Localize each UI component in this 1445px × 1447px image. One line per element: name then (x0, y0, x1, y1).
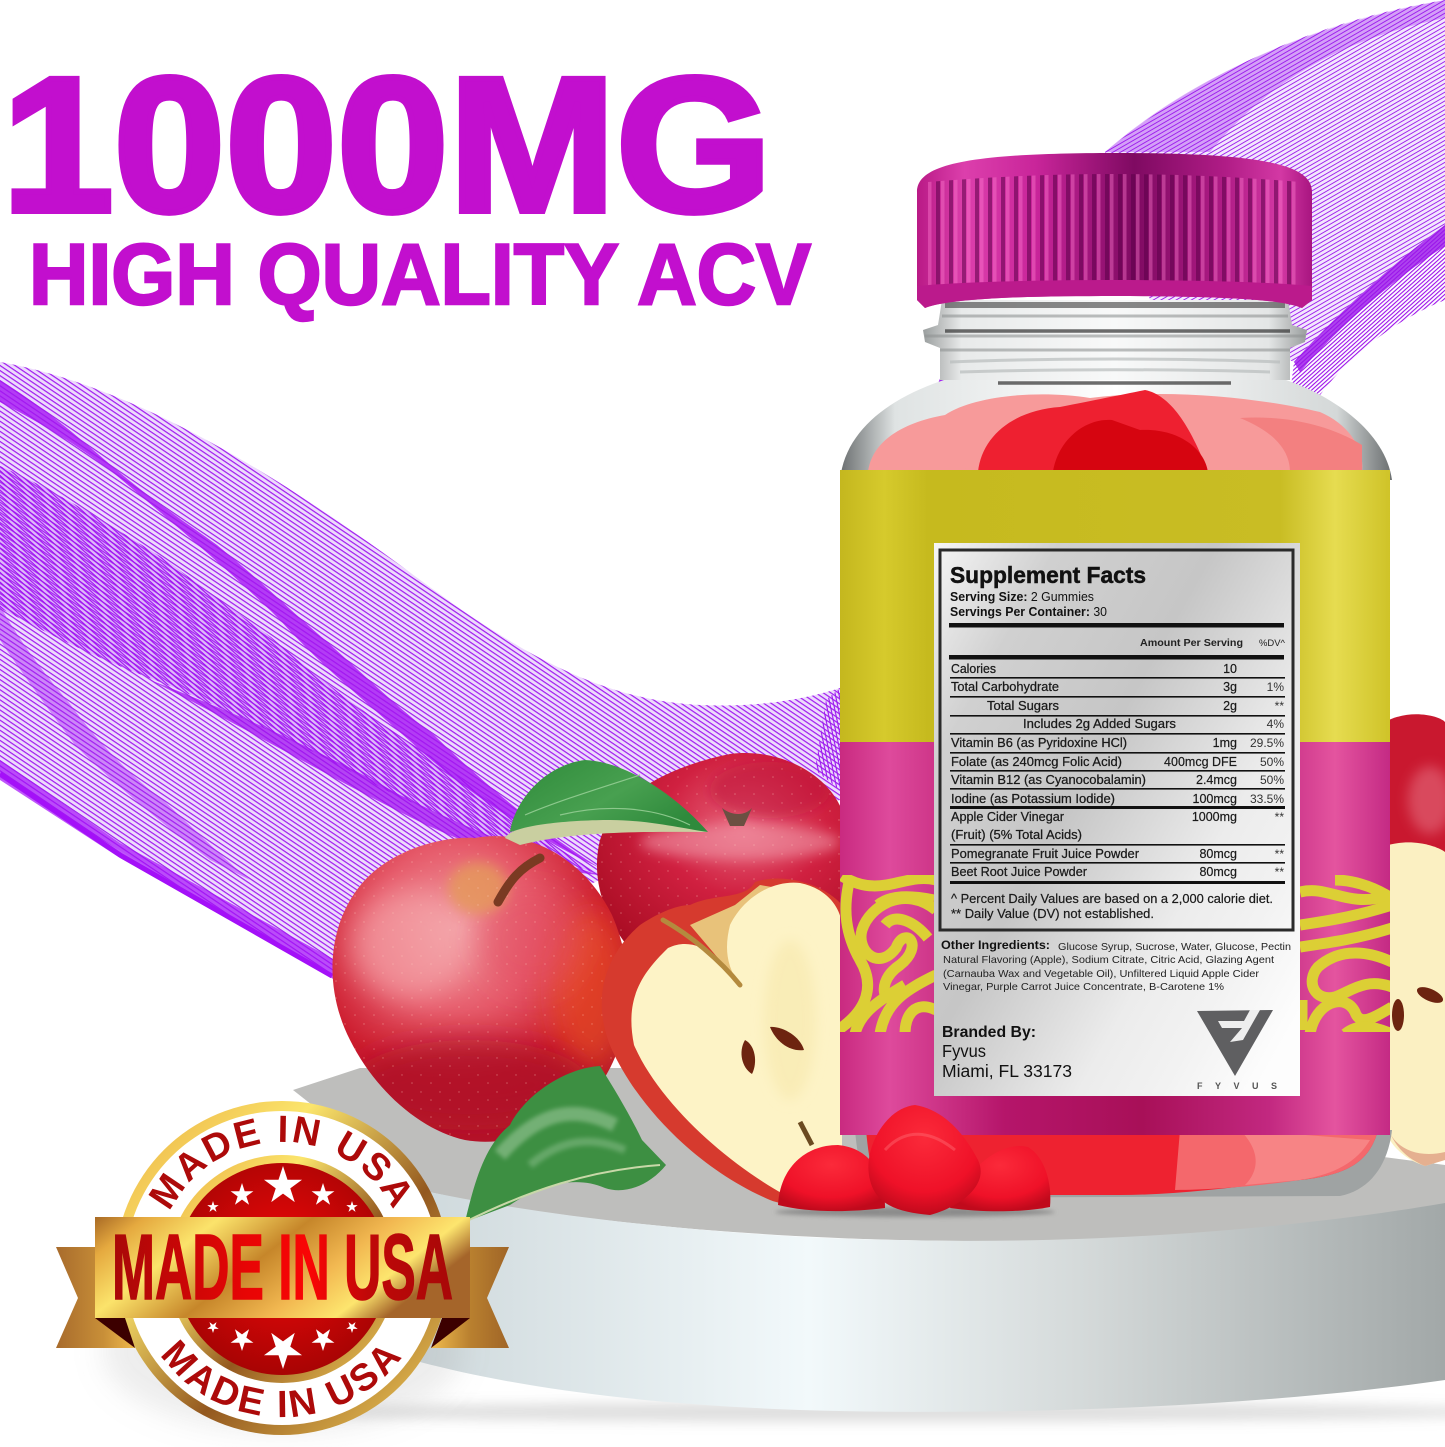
other ingredients: Other Ingredients: (941, 938, 1050, 952)
table daily values: ** (1275, 810, 1284, 824)
ribbon front (95, 1217, 470, 1318)
cut apple stem (663, 920, 740, 985)
bottle label (838, 470, 1392, 1135)
table row labels (951, 662, 1176, 879)
other ingredients: Glucose Syrup, Sucrose, Water, Glucose, Pectin (1058, 941, 1291, 953)
cut apple inner skin (690, 885, 790, 990)
table daily values: 4% (1267, 717, 1284, 731)
table amounts: 10 (1223, 662, 1237, 676)
ribbon tail right (431, 1247, 509, 1348)
badge arc text top: MADE IN USA (148, 1116, 410, 1210)
badge stars (207, 1166, 358, 1369)
table amounts: 2g (1223, 699, 1237, 713)
icon: fyvus logo (1197, 1010, 1277, 1091)
branded by: Miami, FL 33173 (942, 1061, 1072, 1081)
cut apple flesh (631, 883, 842, 1196)
apple: front left (332, 836, 622, 1142)
table row labels: Pomegranate Fruit Juice Powder (951, 847, 1139, 861)
serving info: Serving Size: 2 Gummies (950, 590, 1094, 604)
ribbon dark folds (95, 1318, 470, 1348)
gummies on platform (775, 1105, 1055, 1217)
wave lens: dense middle (0, 466, 600, 875)
badge white field (125, 1111, 439, 1425)
wave base: whole ribbon (0, 362, 840, 985)
platform shadow (280, 1402, 1445, 1422)
bottle neck glass (923, 300, 1307, 380)
apple behind bottle, right (1385, 714, 1445, 1166)
wave crease: upper dark fold (0, 380, 600, 868)
platform top surface (293, 1068, 1445, 1241)
table row labels: Apple Cider Vinegar (951, 810, 1064, 824)
apple: back (596, 753, 840, 942)
bottle cap (917, 153, 1312, 308)
badge arc text bottom: MADE IN USA (161, 1339, 402, 1418)
facts heading: Supplement Facts (950, 562, 1146, 588)
other ingredients: Vinegar, Purple Carrot Juice Concentrate, B-Carotene 1% (943, 981, 1224, 993)
title: 1000MG: 1000MG (2, 37, 772, 252)
table amounts (1164, 662, 1237, 879)
table amounts: 100mcg (1193, 792, 1237, 806)
apple: cut half (602, 879, 842, 1205)
bottle (838, 153, 1392, 1198)
supplement facts panel (934, 543, 1300, 1096)
table row labels: Vitamin B12 (as Cyanocobalamin) (951, 773, 1146, 787)
table daily values: 29.5% (1250, 736, 1284, 750)
ribbon headline: MADE IN USA (112, 1215, 453, 1319)
table daily values (1250, 680, 1284, 879)
footnotes: ^ Percent Daily Values are based on a 2,000 calorie diet. (951, 892, 1273, 906)
branded by: Fyvus (942, 1041, 986, 1061)
table row labels: (Fruit) (5% Total Acids) (951, 828, 1082, 842)
other ingredients (941, 938, 1291, 993)
wave: crosshatch near bottle (815, 688, 840, 790)
purple wave: top right (936, 0, 1445, 395)
leaf: bottom (465, 1066, 666, 1222)
table row labels: Folate (as 240mcg Folic Acid) (951, 755, 1122, 769)
table daily values: 50% (1260, 773, 1284, 787)
table row labels: Includes 2g Added Sugars (1023, 717, 1176, 731)
table amounts: 3g (1223, 680, 1237, 694)
apple stem (498, 858, 540, 902)
table header: Amount Per Serving (1140, 637, 1243, 649)
table header (1140, 637, 1286, 649)
badge soft shadow (102, 1272, 462, 1432)
label swirl right (1300, 880, 1392, 1034)
apple seeds (741, 1040, 755, 1074)
table row labels: Total Sugars (987, 699, 1059, 713)
facts box border (940, 550, 1293, 930)
table amounts: 400mcg DFE (1164, 755, 1237, 769)
table daily values: 50% (1260, 755, 1284, 769)
table header: %DV^ (1259, 638, 1286, 649)
bottle shoulder glass (840, 380, 1392, 480)
table daily values: ** (1275, 699, 1284, 713)
other ingredients: (Carnauba Wax and Vegetable Oil), Unfiltered Liquid Apple Cider (943, 968, 1260, 980)
table amounts: 2.4mcg (1196, 773, 1237, 787)
gummies inside top of bottle (868, 390, 1362, 472)
serving info: Servings Per Container: 30 (950, 605, 1107, 619)
leaf: top (505, 760, 708, 845)
badge red center (176, 1163, 388, 1375)
footnotes (951, 892, 1273, 921)
platform side wall (420, 1190, 1445, 1412)
table amounts: 1000mg (1192, 810, 1237, 824)
table daily values: ** (1275, 865, 1284, 879)
table amounts: 80mcg (1199, 865, 1237, 879)
table row labels: Vitamin B6 (as Pyridoxine HCl) (951, 736, 1127, 750)
branded by (942, 1024, 1072, 1081)
table amounts: 1mg (1213, 736, 1237, 750)
icon: fyvus logo: FYVUS (1197, 1081, 1277, 1091)
footnotes: ** Daily Value (DV) not established. (951, 907, 1154, 921)
badge outer ring (115, 1101, 449, 1435)
table row labels: Iodine (as Potassium Iodide) (951, 792, 1115, 806)
platform (280, 1068, 1445, 1422)
serving info (950, 590, 1107, 619)
other ingredients: Natural Flavoring (Apple), Sodium Citrate, Citric Acid, Glazing Agent (943, 954, 1274, 966)
table daily values: 33.5% (1250, 792, 1284, 806)
badge: made in USA (56, 1101, 509, 1435)
table row labels: Beet Root Juice Powder (951, 865, 1087, 879)
table rules (949, 623, 1285, 884)
table amounts: 80mcg (1199, 847, 1237, 861)
label swirl left (838, 876, 936, 1034)
wave crease: lower folds (0, 606, 335, 980)
table daily values: 1% (1267, 680, 1284, 694)
bottle bottom with gummies (855, 1130, 1392, 1198)
subtitle: high quality ACV: HIGH QUALITY ACV (29, 227, 811, 323)
table row labels: Total Carbohydrate (951, 680, 1059, 694)
purple wave: left (0, 362, 840, 985)
branded by: Branded By: (942, 1024, 1036, 1041)
ribbon tail left (56, 1247, 135, 1348)
table daily values: ** (1275, 847, 1284, 861)
badge inner ring (168, 1155, 396, 1383)
table row labels: Calories (951, 662, 996, 676)
